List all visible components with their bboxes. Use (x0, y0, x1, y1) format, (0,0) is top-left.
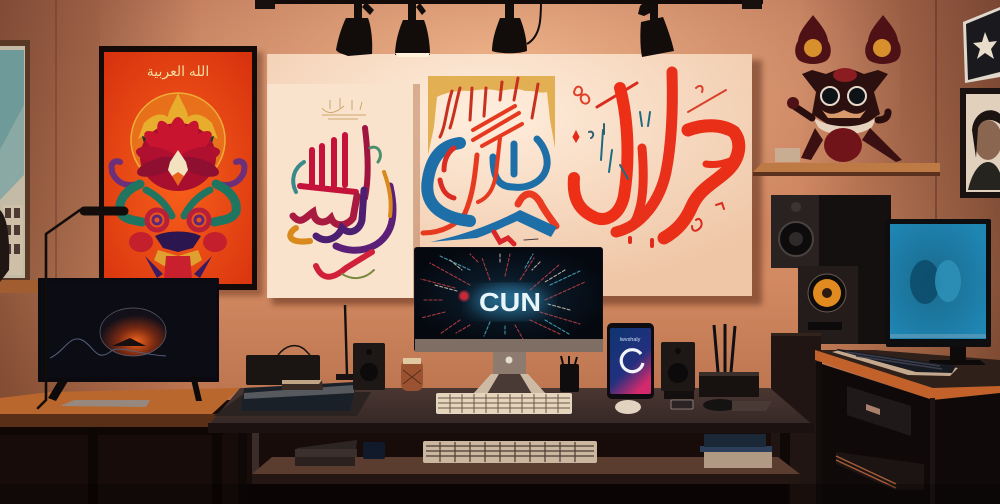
framed pictures on the right wall (960, 7, 1000, 198)
right monitor (886, 219, 991, 365)
light two (395, 3, 430, 57)
small speaker right (661, 342, 695, 391)
lower keyboard (423, 441, 597, 463)
track light rail (255, 0, 763, 9)
shelf right (753, 148, 940, 176)
phone on stand (607, 323, 654, 399)
poster header text: الله العربية (147, 63, 209, 80)
lantern jar (401, 358, 423, 391)
panel: left geometric art (0, 40, 30, 284)
panel: large white calligraphy board (267, 54, 762, 305)
mouse (615, 399, 737, 414)
left monitor (38, 278, 219, 401)
centre desk (208, 388, 814, 504)
studio speakers (771, 195, 891, 344)
light four (638, 2, 674, 57)
phone title: lwvshaly (620, 337, 641, 343)
desk mat with devices (214, 305, 371, 416)
light one (336, 2, 374, 56)
screen logo text: CUN (479, 287, 541, 317)
phone logo (621, 350, 643, 372)
main monitor (414, 247, 603, 394)
warm overlay (0, 484, 1000, 504)
main keyboard (436, 393, 572, 414)
lower shelf objects (295, 434, 772, 468)
flower ornament (112, 93, 244, 278)
right keyboard (832, 349, 958, 376)
light three (492, 0, 541, 53)
desk accessories (664, 391, 772, 411)
small speaker left (353, 343, 385, 390)
panel: centre calligraphy with gold banner (423, 76, 557, 244)
panel: right red calligraphy (573, 72, 740, 246)
panel: left calligraphy poster (267, 84, 420, 298)
left wood desk (0, 388, 240, 504)
pen holder (560, 356, 579, 392)
right desk (771, 333, 1000, 504)
desk lamp (38, 210, 124, 408)
starburst lines (421, 252, 585, 339)
demon mask figure (787, 15, 902, 162)
panel: orange ornamental poster (99, 46, 263, 296)
black pens and box (699, 324, 759, 397)
shelf left (0, 210, 42, 293)
